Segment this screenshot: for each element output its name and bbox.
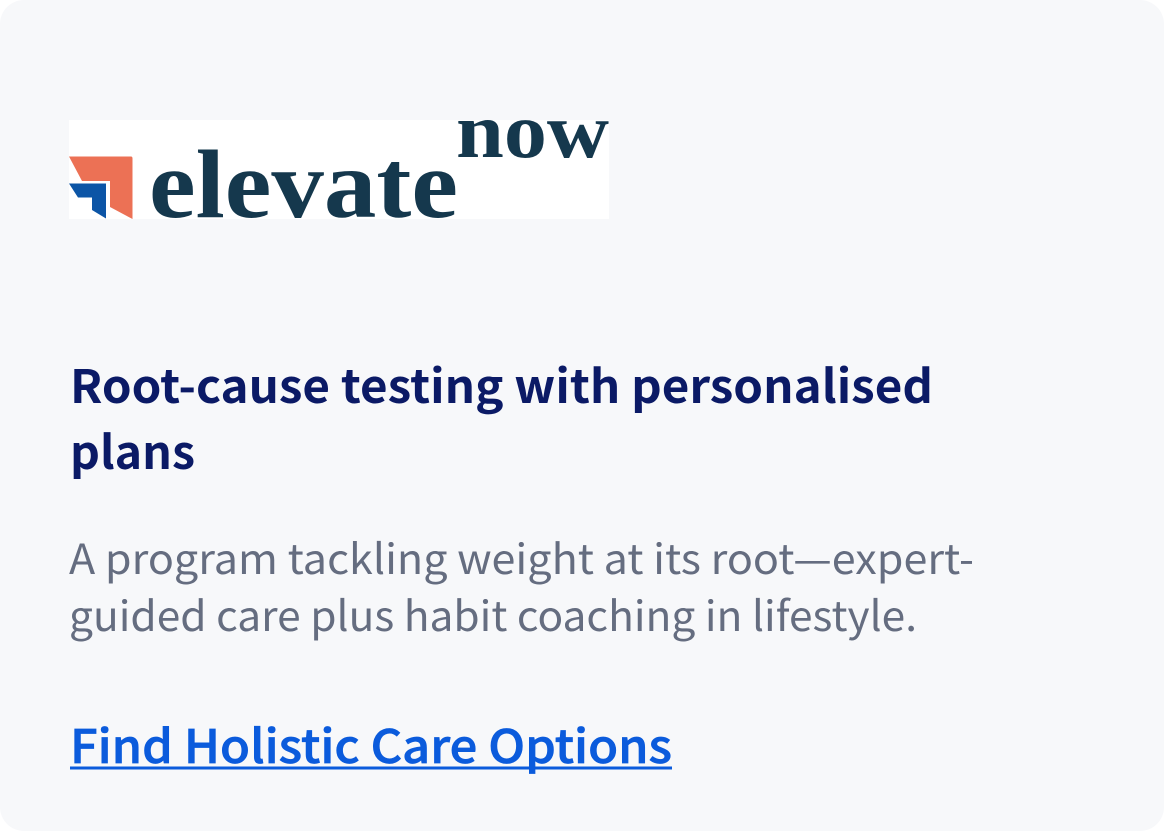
heading: plans <box>70 417 195 483</box>
description text: A program tackling weight at its root—expert- <box>69 526 974 586</box>
link: Find Holistic Care Options <box>70 711 672 777</box>
heading <box>70 351 933 483</box>
description text <box>69 526 974 643</box>
logo wordmark: elevate: elevate <box>149 131 458 238</box>
logo wordmark: now: now <box>456 87 609 174</box>
logo: elevate now <box>69 87 609 238</box>
icon: blue arrow mark <box>69 184 106 218</box>
description text: guided care plus habit coaching in lifestyle. <box>69 583 917 643</box>
icon: orange arrow mark <box>69 156 132 219</box>
heading: Root-cause testing with personalised <box>70 351 933 417</box>
